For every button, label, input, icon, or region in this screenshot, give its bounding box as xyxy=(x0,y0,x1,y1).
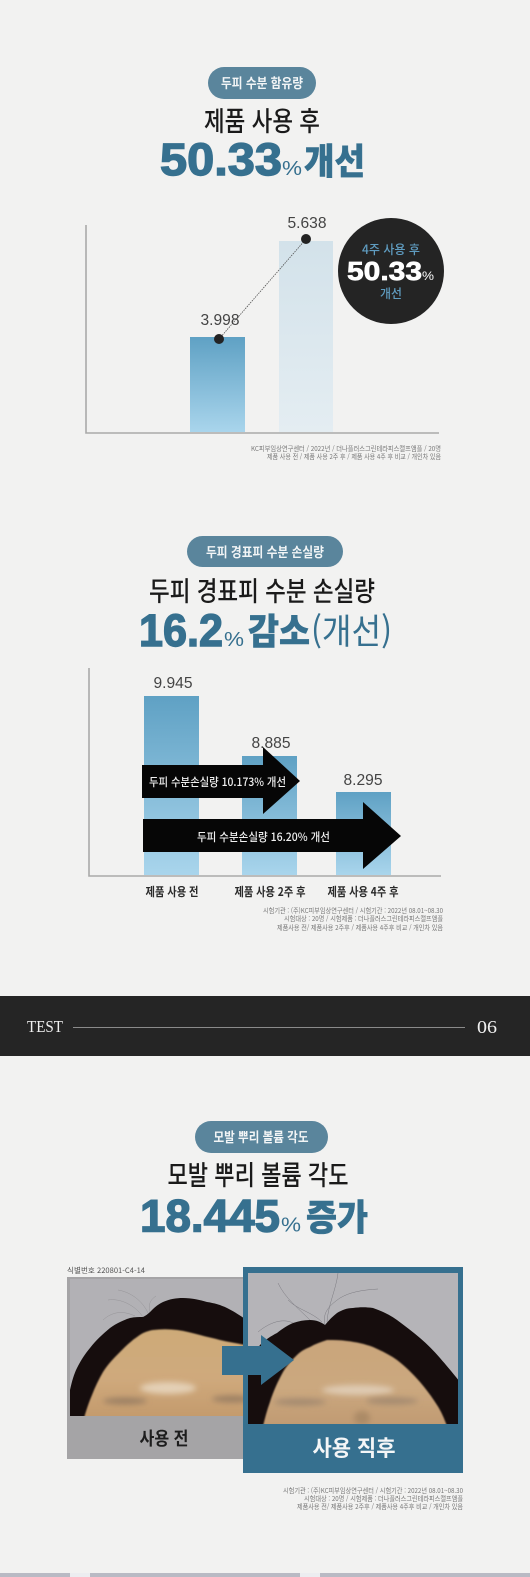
footnote: chart two: 시험대상 : 20명 / 시험제품 : 더나플러스그린테라피스캘프앰플 xyxy=(284,913,443,923)
pill: scalp stratum corneum moisture loss: 두피 경표피 수분 손실량 xyxy=(206,541,324,561)
headline: 50.33% improvement: % xyxy=(282,158,302,180)
value label 9.945: 9.945 xyxy=(154,675,192,692)
bar: before use xyxy=(190,337,245,432)
pill: hair root volume angle xyxy=(195,1121,328,1153)
chart: moisture loss bars xyxy=(89,668,441,900)
photo: before use xyxy=(70,1279,243,1416)
caption: before use: 사용 전 xyxy=(140,1425,188,1451)
footnote: chart two: 제품사용 전/ 제품사용 2주후 / 제품사용 4주후 비교 / 개인차 있음 xyxy=(277,922,443,932)
bar: before use xyxy=(144,696,199,875)
pill: scalp moisture content: 두피 수분 함유량 xyxy=(221,72,304,92)
bar: 2 weeks xyxy=(242,756,297,875)
section band: TEST 06: 06 xyxy=(477,1017,497,1037)
callout: 50.33% after 4 weeks: 50.33 xyxy=(347,256,422,286)
footnote: photo section: 시험기관 : (주)KC피부임상연구센터 / 시험기간 : 2022년 08.01~08.30 xyxy=(283,1485,463,1495)
arrow: 10.173% improvement: 두피 수분손실량 10.173% 개선 xyxy=(149,774,286,790)
axis label: after 2 weeks: 제품 사용 2주 후 xyxy=(234,883,306,900)
headline: 18.445% increase: % xyxy=(281,1214,301,1236)
callout: 50.33% after 4 weeks xyxy=(338,218,444,324)
headline: 50.33% improvement: 개선 xyxy=(304,133,365,185)
headline: 50.33% improvement: 50.33 xyxy=(160,134,282,185)
headline: 16.2% decrease xyxy=(139,603,392,656)
axis label: before use: 제품 사용 전 xyxy=(146,883,198,900)
headline: 18.445% increase xyxy=(140,1189,368,1242)
heading: hair root volume angle: 모발 뿌리 볼륨 각도 xyxy=(168,1154,348,1193)
callout: 50.33% after 4 weeks: 4주 사용 후 xyxy=(362,239,420,258)
value label 5.638: 5.638 xyxy=(288,215,326,232)
chart axes xyxy=(86,225,439,433)
value label 3.998: 3.998 xyxy=(200,312,240,329)
footnote: photo section: 제품사용 전/ 제품사용 2주후 / 제품사용 4주후 비교 / 개인차 있음 xyxy=(297,1501,463,1511)
connector line with dots xyxy=(214,234,311,344)
headline: 18.445% increase: 18.445 xyxy=(140,1190,280,1242)
pill: scalp moisture content xyxy=(208,67,316,99)
panel: before use xyxy=(65,1277,252,1459)
headline: 16.2% decrease: % xyxy=(224,629,244,651)
panel: right after use xyxy=(243,1267,463,1473)
footnote: photo section xyxy=(283,1485,463,1511)
footnote: photo section: 시험대상 : 20명 / 시험제품 : 더나플러스그린테라피스캘프앰플 xyxy=(304,1493,463,1503)
heading: moisture loss: 두피 경표피 수분 손실량 xyxy=(149,570,375,609)
headline: 16.2% decrease: 16.2 xyxy=(139,605,223,656)
headline: 16.2% decrease: 감소 xyxy=(248,603,310,655)
bar: 4 weeks xyxy=(336,792,391,875)
pill: scalp stratum corneum moisture loss xyxy=(187,536,343,567)
heading: after product use: 제품 사용 후 xyxy=(204,100,320,139)
footnote: chart one: 제품 사용 전 / 제품 사용 2주 후 / 제품 사용 4주 후 비교 / 개인차 있음 xyxy=(267,451,441,461)
callout: 50.33% after 4 weeks: % xyxy=(422,269,434,283)
arrow: before to after xyxy=(222,1335,294,1385)
headline: 16.2% decrease: (개선) xyxy=(311,604,392,655)
headline: 18.445% increase: 증가 xyxy=(306,1189,368,1241)
value label 8.295: 8.295 xyxy=(344,772,382,789)
arrow: 10.173% improvement xyxy=(142,747,300,814)
bottom edge strip xyxy=(0,1573,530,1577)
bar: after use xyxy=(279,241,333,432)
arrow: 16.20% improvement xyxy=(143,802,401,869)
caption: right after use: 사용 직후 xyxy=(312,1431,396,1463)
footnote: chart one xyxy=(251,443,441,461)
chart axes xyxy=(89,668,441,876)
arrow: 16.20% improvement: 두피 수분손실량 16.20% 개선 xyxy=(197,829,330,845)
callout: 50.33% after 4 weeks: 개선 xyxy=(380,283,402,302)
axis label: after 4 weeks: 제품 사용 4주 후 xyxy=(328,883,398,900)
pill: hair root volume angle: 모발 뿌리 볼륨 각도 xyxy=(214,1126,308,1146)
footnote: chart two: 시험기관 : (주)KC피부임상연구센터 / 시험기간 : 2022년 08.01~08.30 xyxy=(263,905,443,915)
footnote: chart two xyxy=(263,905,443,932)
footnote: chart one: KC피부임상연구센터 / 2022년 / 더나플러스그린테라피스캘프앰플 / 20명 xyxy=(251,443,441,453)
value label 8.885: 8.885 xyxy=(252,735,290,752)
section band: TEST 06: TEST xyxy=(27,1017,64,1036)
section band: TEST 06 xyxy=(0,996,530,1056)
chart: moisture content bars xyxy=(86,215,439,433)
specimen id: 식별번호 220801-C4-14 xyxy=(67,1265,145,1276)
headline: 50.33% improvement xyxy=(160,133,365,185)
photo: right after use xyxy=(244,1273,460,1428)
